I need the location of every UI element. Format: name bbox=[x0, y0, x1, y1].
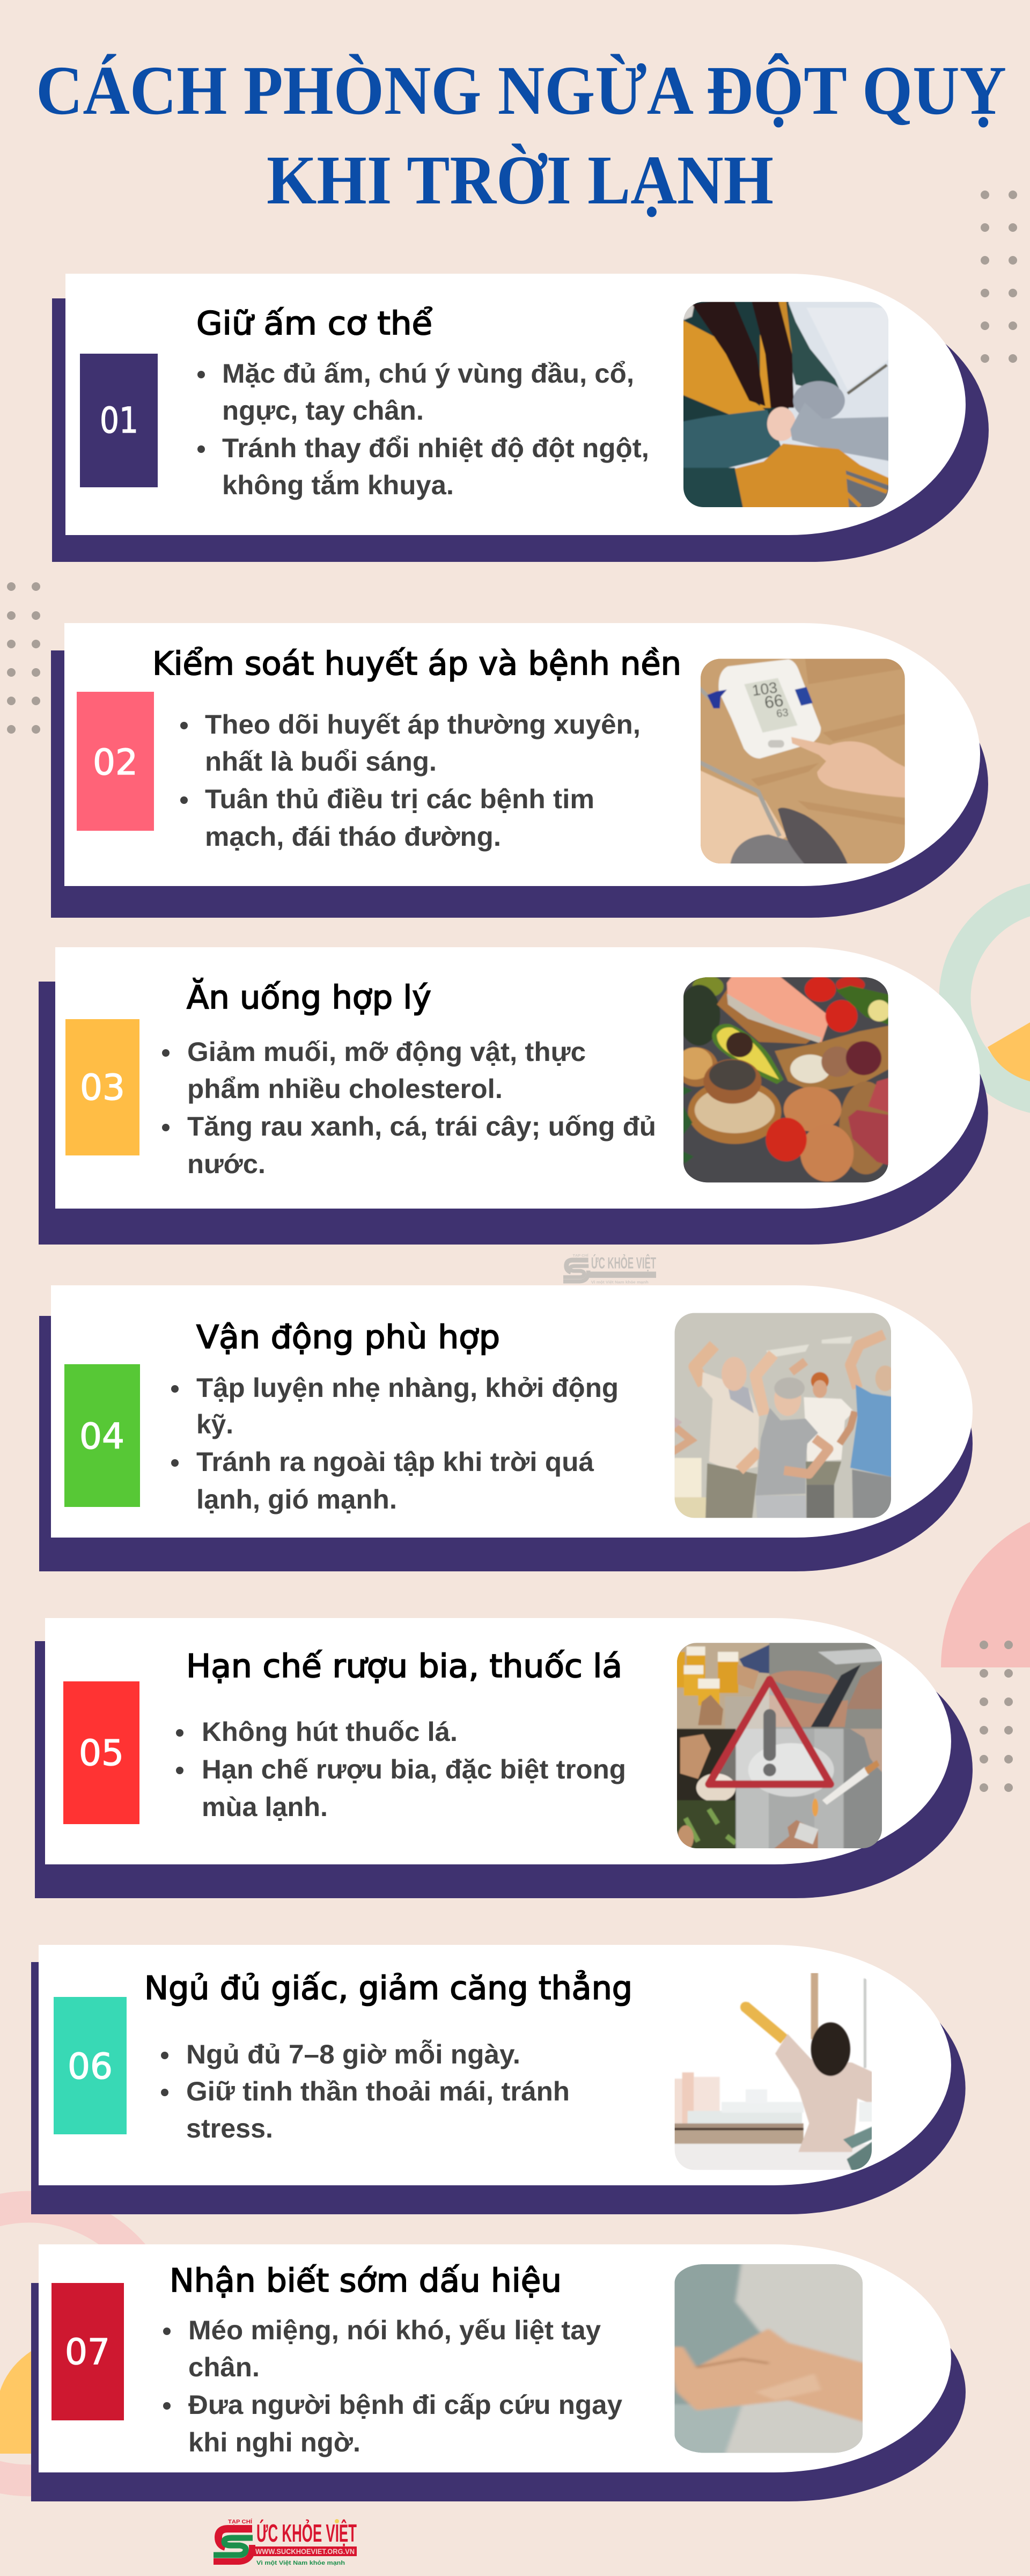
text block 05: Hạn chế rượu bia, đặc biệt trong bbox=[202, 1754, 626, 1784]
text block 03: Giảm muối, mỡ động vật, thực bbox=[187, 1037, 586, 1067]
photo: scarf and gloves in snow bbox=[683, 302, 888, 507]
text block 04: lạnh, gió mạnh. bbox=[196, 1484, 397, 1514]
text block 01: Mặc đủ ấm, chú ý vùng đầu, cổ, bbox=[222, 358, 634, 389]
panel: card 07 bbox=[31, 2244, 966, 2501]
text block 04 bbox=[171, 1373, 619, 1514]
heading 02: Kiểm soát huyết áp và bệnh nền bbox=[152, 645, 681, 683]
number box 05 bbox=[63, 1681, 139, 1824]
number box 06: 06 bbox=[68, 2046, 113, 2087]
text block 01: không tắm khuya. bbox=[222, 470, 454, 500]
number box 01: 01 bbox=[100, 400, 138, 441]
panel: card 04 bbox=[39, 1285, 973, 1571]
decoration: dots right middle bbox=[980, 1641, 1013, 1792]
number box 07 bbox=[52, 2283, 124, 2420]
text block 05 bbox=[176, 1717, 626, 1822]
panel: card 06 bbox=[31, 1945, 966, 2214]
heading 01: Giữ ấm cơ thể bbox=[196, 305, 432, 342]
decoration: yellow shape left bbox=[0, 2351, 31, 2454]
watermark logo bbox=[563, 1253, 656, 1285]
number box 06 bbox=[54, 1997, 127, 2134]
panel: card 03 bbox=[39, 947, 988, 1245]
number box 01 bbox=[80, 354, 158, 487]
title: KHI TRỜI LẠNH bbox=[267, 142, 774, 219]
logo: WWW.SUCKHOEVIET.ORG.VN bbox=[255, 2547, 355, 2556]
text block 06 bbox=[161, 2039, 570, 2143]
text block 01: Tránh thay đổi nhiệt độ đột ngột, bbox=[222, 433, 649, 463]
watermark logo: ỨC KHỎE VIỆT bbox=[591, 1254, 656, 1272]
number box 04: 04 bbox=[79, 1416, 124, 1457]
number box 03 bbox=[65, 1019, 139, 1155]
text block 03 bbox=[162, 1037, 656, 1179]
photo: hands bbox=[664, 2257, 874, 2462]
text block 07: chân. bbox=[188, 2352, 260, 2382]
logo bbox=[214, 2518, 357, 2566]
photo: stretching in the morning bbox=[672, 1970, 876, 2174]
decoration: yellow shape right bbox=[988, 1022, 1030, 1081]
photo: blood pressure monitor: 63 bbox=[776, 707, 789, 720]
text block 03: Tăng rau xanh, cá, trái cây; uống đủ bbox=[187, 1111, 656, 1141]
number box 05: 05 bbox=[79, 1732, 124, 1774]
photo: blood pressure monitor: 66 bbox=[763, 690, 785, 712]
photo: alcohol and smoking warning bbox=[673, 1640, 886, 1852]
title bbox=[36, 52, 1006, 219]
decoration: pink ring left bbox=[0, 2207, 166, 2480]
number box 04 bbox=[64, 1364, 140, 1507]
text block 06: Ngủ đủ 7–8 giờ mỗi ngày. bbox=[186, 2039, 520, 2069]
number box 03: 03 bbox=[80, 1067, 125, 1108]
text block 02 bbox=[180, 709, 641, 852]
text block 04: Tập luyện nhẹ nhàng, khởi động bbox=[196, 1373, 619, 1403]
decoration: dots left bbox=[7, 582, 40, 734]
decoration: pink quarter circle bbox=[941, 1522, 1030, 1667]
text block 01 bbox=[197, 358, 649, 500]
text block 06: stress. bbox=[186, 2113, 273, 2143]
panel: card 01 bbox=[52, 274, 989, 562]
logo: Vì một Việt Nam khỏe mạnh bbox=[256, 2560, 345, 2566]
heading 07: Nhận biết sớm dấu hiệu bbox=[170, 2262, 562, 2300]
decoration: green ring bbox=[955, 896, 1030, 1100]
photo: blood pressure monitor bbox=[701, 659, 905, 863]
photo: blood pressure monitor: 103 bbox=[751, 679, 778, 700]
text block 07: Méo miệng, nói khó, yếu liệt tay bbox=[188, 2315, 601, 2345]
decoration: dots top right bbox=[981, 191, 1017, 363]
text block 01: ngực, tay chân. bbox=[222, 396, 424, 426]
text block 02: mạch, đái tháo đường. bbox=[205, 822, 501, 852]
watermark logo: TẠP CHÍ bbox=[573, 1253, 588, 1258]
panel: card 05 bbox=[35, 1618, 973, 1898]
heading 05: Hạn chế rượu bia, thuốc lá bbox=[186, 1648, 622, 1685]
text block 07: Đưa người bệnh đi cấp cứu ngay bbox=[188, 2390, 622, 2420]
text block 04: Tránh ra ngoài tập khi trời quá bbox=[196, 1447, 594, 1477]
panel: card 02 bbox=[51, 623, 988, 918]
text block 02: nhất là buổi sáng. bbox=[205, 747, 437, 777]
text block 03: nước. bbox=[187, 1149, 266, 1179]
photo: seniors exercising bbox=[670, 1306, 897, 1523]
logo: TẠP CHÍ bbox=[228, 2518, 252, 2525]
number box 07: 07 bbox=[65, 2331, 110, 2373]
number box 02: 02 bbox=[93, 742, 138, 783]
watermark logo: Vì một Việt Nam khỏe mạnh bbox=[591, 1280, 649, 1285]
number box 02 bbox=[77, 692, 154, 831]
text block 04: kỹ. bbox=[196, 1409, 233, 1439]
text block 03: phẩm nhiều cholesterol. bbox=[187, 1074, 503, 1104]
text block 06: Giữ tinh thần thoải mái, tránh bbox=[186, 2076, 570, 2106]
text block 07: khi nghi ngờ. bbox=[188, 2427, 360, 2457]
text block 07 bbox=[163, 2315, 622, 2457]
text block 02: Tuân thủ điều trị các bệnh tim bbox=[205, 784, 594, 814]
text block 02: Theo dõi huyết áp thường xuyên, bbox=[205, 709, 641, 740]
heading 04: Vận động phù hợp bbox=[196, 1319, 500, 1356]
logo: ỨC KHỎE VIỆT bbox=[256, 2519, 357, 2547]
text block 05: Không hút thuốc lá. bbox=[202, 1717, 458, 1747]
text block 05: mùa lạnh. bbox=[202, 1792, 328, 1822]
heading 06: Ngủ đủ giấc, giảm căng thẳng bbox=[144, 1970, 632, 2007]
photo: healthy food bbox=[683, 977, 888, 1183]
heading 03: Ăn uống hợp lý bbox=[187, 978, 431, 1016]
